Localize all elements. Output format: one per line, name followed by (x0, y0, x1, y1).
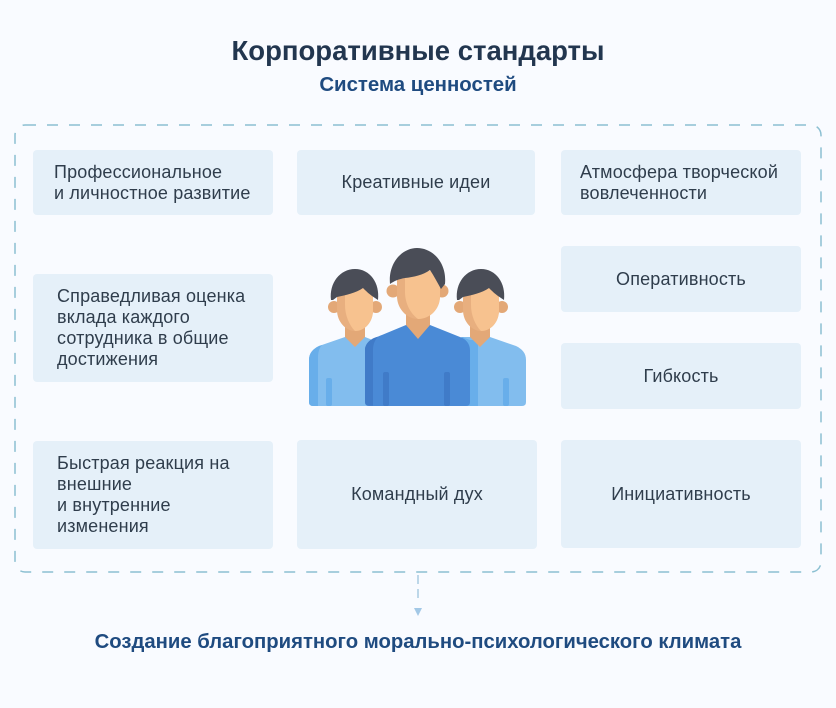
card: quick reaction: внешние (57, 474, 132, 494)
card: creative atmosphere: вовлеченности (580, 182, 707, 202)
conclusion: Создание благоприятного морально-психологического климата (95, 631, 741, 653)
card: creative atmosphere (561, 150, 801, 215)
card: initiative: Инициативность (611, 484, 751, 504)
card: flexibility: Гибкость (643, 366, 719, 386)
card: fair assessment: достижения (57, 349, 158, 369)
card: responsiveness: Оперативность (616, 268, 746, 288)
subtitle: Система ценностей (319, 74, 517, 96)
card: responsiveness (561, 246, 801, 312)
card: creative atmosphere: Атмосфера творческой (580, 162, 778, 182)
card: initiative (561, 440, 801, 548)
card: professional development (33, 150, 273, 215)
card: creative ideas: Креативные идеи (342, 172, 490, 192)
card: team spirit (297, 440, 537, 549)
card: professional development: и личностное развитие (54, 182, 251, 202)
title: Корпоративные стандарты (232, 35, 604, 66)
card: quick reaction (33, 441, 273, 549)
card: professional development: Профессиональное (54, 162, 222, 182)
left person (309, 269, 385, 406)
card: creative ideas (297, 150, 535, 215)
right person (450, 269, 526, 406)
icon: team of three people (309, 248, 526, 406)
centre person (365, 248, 470, 406)
card: fair assessment (33, 274, 273, 382)
card: fair assessment: Справедливая оценка (57, 286, 245, 306)
card: team spirit: Командный дух (351, 484, 483, 504)
card: flexibility (561, 343, 801, 409)
card: quick reaction: и внутренние (57, 495, 171, 515)
card: quick reaction: изменения (57, 516, 149, 536)
card: fair assessment: вклада каждого (57, 307, 190, 327)
card: fair assessment: сотрудника в общие (57, 328, 229, 348)
card: quick reaction: Быстрая реакция на (57, 453, 230, 473)
